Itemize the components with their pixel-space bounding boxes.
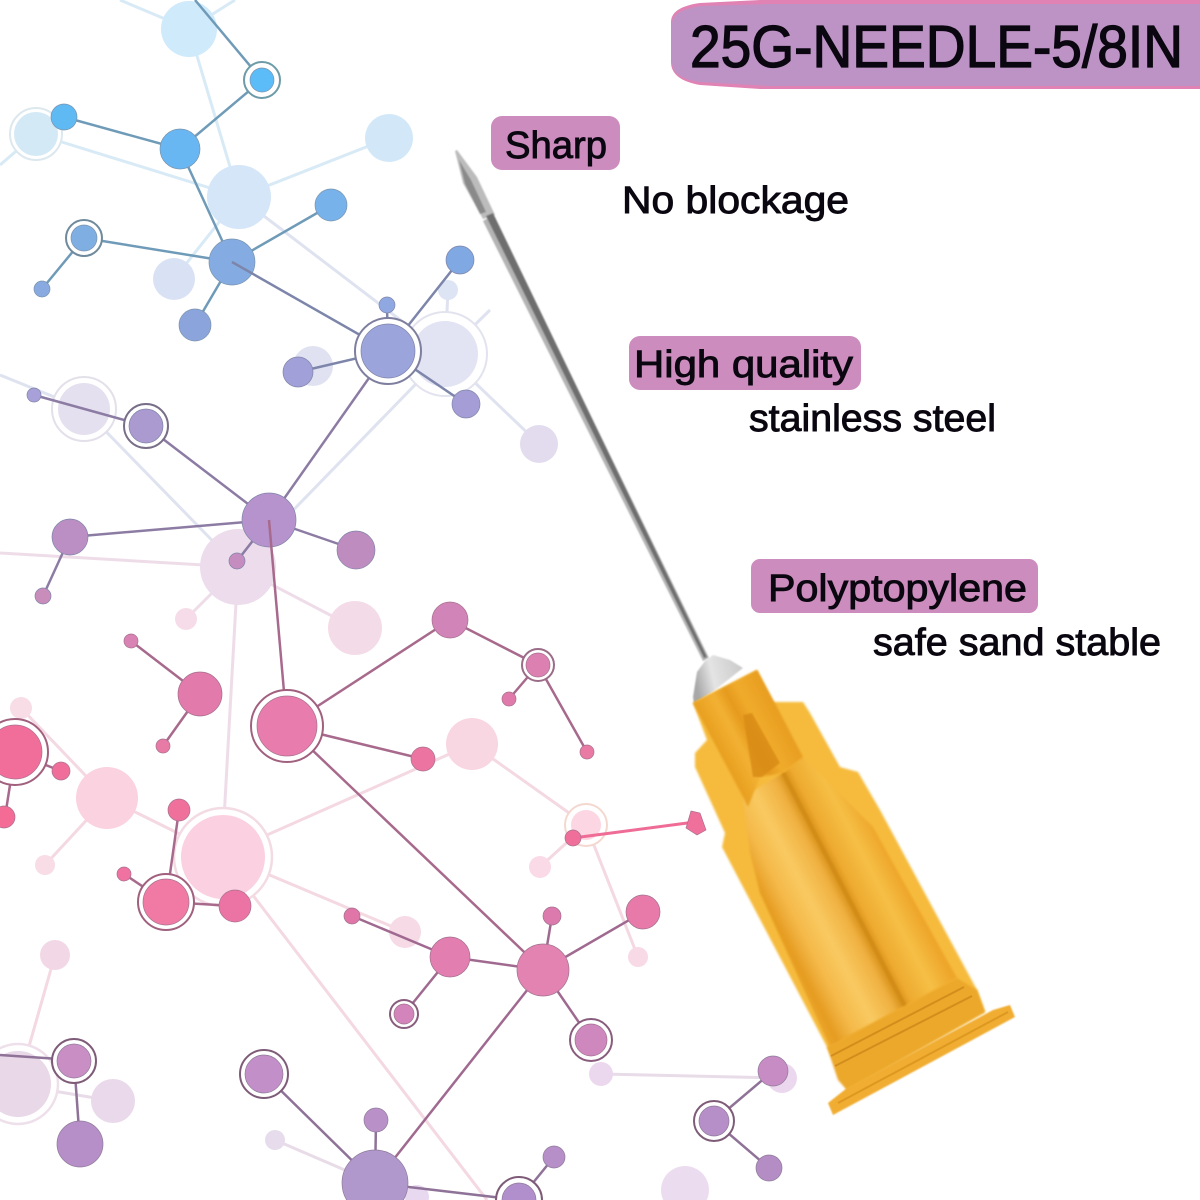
inner body: [743, 757, 957, 1047]
flange: [828, 1005, 1015, 1115]
pale background molecular network: [0, 0, 797, 1200]
callout: polyptopylene: Polyptopylene: [768, 568, 1027, 610]
callout: polyptopylene: [751, 559, 1038, 613]
pink molecular cluster: [0, 520, 706, 970]
needle hub: orange polypropylene: [693, 655, 1015, 1115]
callout text: safe sand stable: safe sand stable: [873, 622, 1161, 664]
callout text: no blockage: No blockage: [622, 180, 849, 222]
magenta molecular cluster: [344, 895, 660, 1183]
grey cone: [693, 655, 743, 704]
callout text: stainless steel: stainless steel: [749, 398, 996, 440]
callout: sharp: [491, 116, 620, 170]
upper tube: [693, 670, 803, 807]
callout: sharp: Sharp: [505, 125, 607, 167]
central ridge: [783, 773, 907, 1010]
needle shaft and bevel tip: [455, 150, 709, 661]
lower purple molecular cluster: [0, 1039, 788, 1200]
base collar: [827, 978, 985, 1090]
slot detail: [743, 713, 780, 777]
callout: high quality: High quality: [634, 344, 853, 386]
violet molecular cluster: [27, 246, 480, 604]
blue molecular cluster: [34, 0, 347, 341]
title badge: [671, 0, 1200, 89]
callout: high quality: [629, 336, 861, 390]
hub wings and body silhouette: [693, 670, 985, 1090]
